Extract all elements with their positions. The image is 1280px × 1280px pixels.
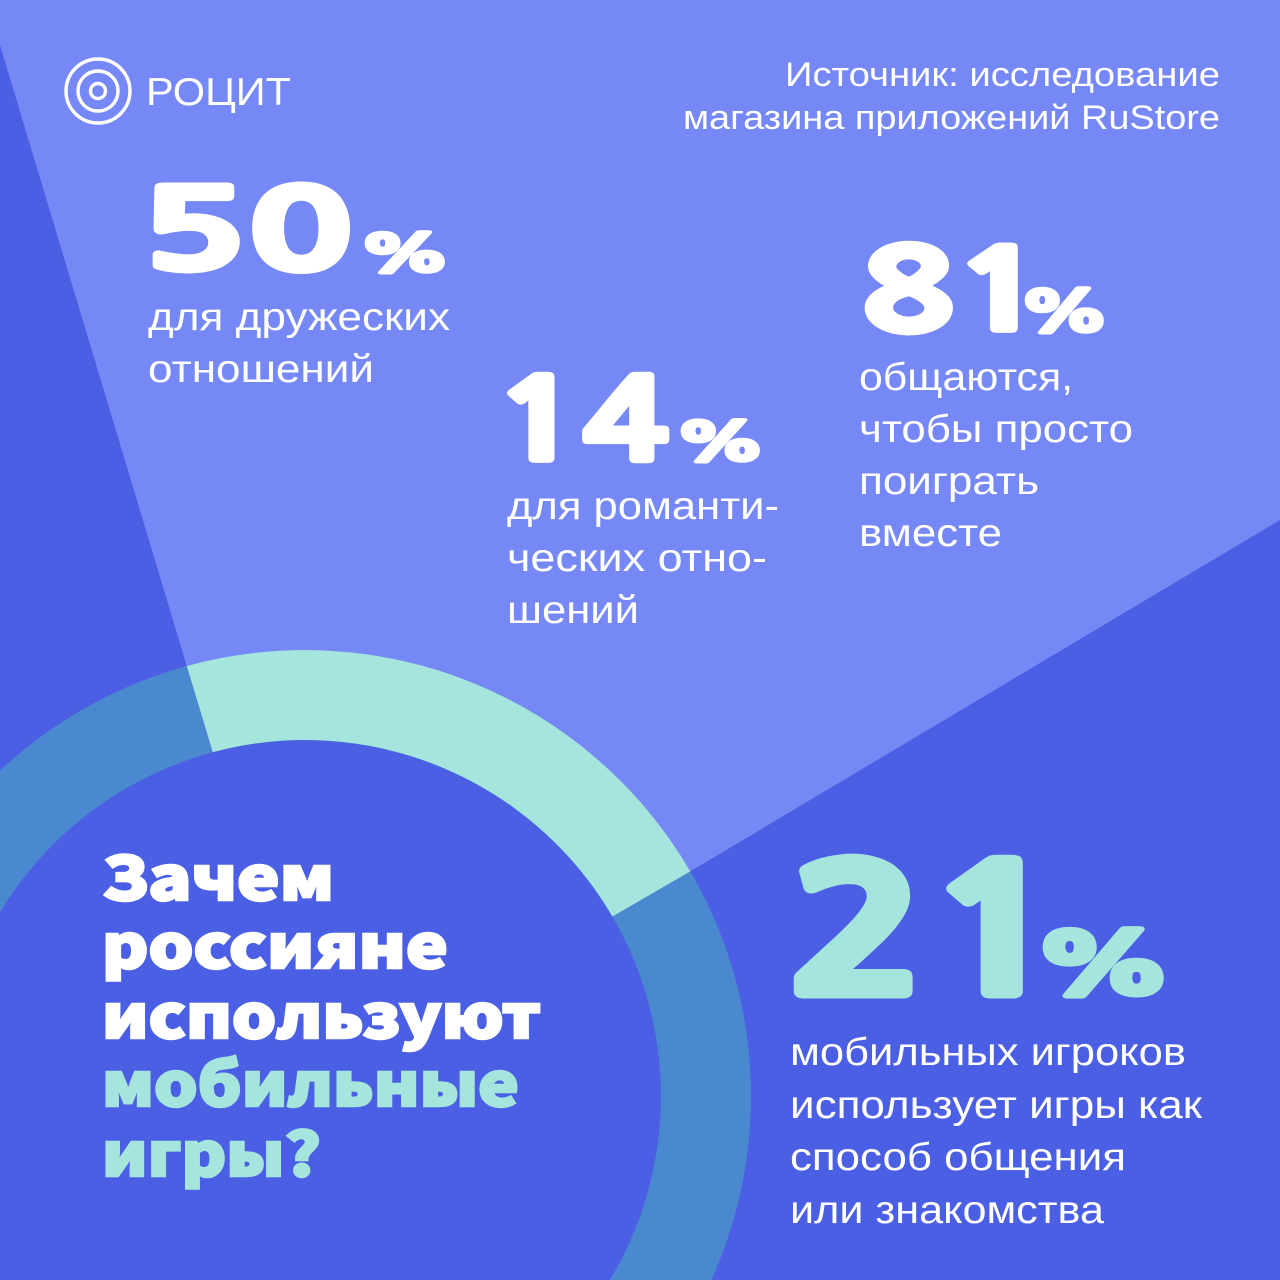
source note: Источник: исследование: [785, 56, 1220, 94]
logo wordmark: РОЦИТ: [146, 71, 291, 114]
stat: 81%: 81: [862, 236, 1047, 346]
stat: 81%: [859, 236, 1133, 555]
source note: магазина приложений RuStore: [683, 99, 1220, 137]
stat: 21%: использует игры как: [790, 1084, 1203, 1127]
title: мобильные: [102, 1037, 519, 1124]
logo: [66, 59, 291, 123]
stat: 81%: вместе: [859, 512, 1002, 555]
stat: 21%: %: [1031, 924, 1173, 1008]
stat: 81%: общаются,: [859, 356, 1073, 399]
title: Зачем: [102, 831, 334, 918]
stat: 21%: мобильных игроков: [790, 1031, 1186, 1074]
stat: 14%: 14: [495, 365, 669, 476]
stat: 50%: 50: [140, 176, 352, 286]
stat: 14%: %: [673, 416, 766, 469]
stat: 81%: чтобы просто: [859, 408, 1133, 451]
light wedge: [0, 0, 1280, 893]
stat: 21%: [787, 845, 1203, 1232]
stat: 21%: 21: [787, 845, 1067, 1020]
donut ring: [0, 650, 751, 1280]
stat: 50%: [140, 176, 451, 391]
stat: 14%: для романти-: [507, 485, 779, 528]
stat: 50%: отношений: [148, 348, 374, 391]
stat: 81%: поиграть: [859, 460, 1039, 503]
stat: 21%: способ общения: [790, 1136, 1126, 1179]
stat: 14%: шений: [507, 589, 639, 632]
stat: 21%: или знакомства: [790, 1189, 1104, 1232]
title: россияне: [102, 899, 448, 986]
source note: [683, 56, 1220, 137]
stat: 14%: [495, 365, 779, 632]
title: игры?: [102, 1107, 321, 1194]
stat: 14%: ческих отно-: [507, 537, 767, 580]
title: [102, 831, 541, 1194]
stat: 50%: %: [357, 229, 451, 280]
icon: concentric circles: [66, 59, 130, 123]
title: используют: [102, 969, 541, 1056]
stat: 81%: %: [1017, 285, 1110, 341]
stat: 50%: для дружеских: [148, 296, 451, 339]
